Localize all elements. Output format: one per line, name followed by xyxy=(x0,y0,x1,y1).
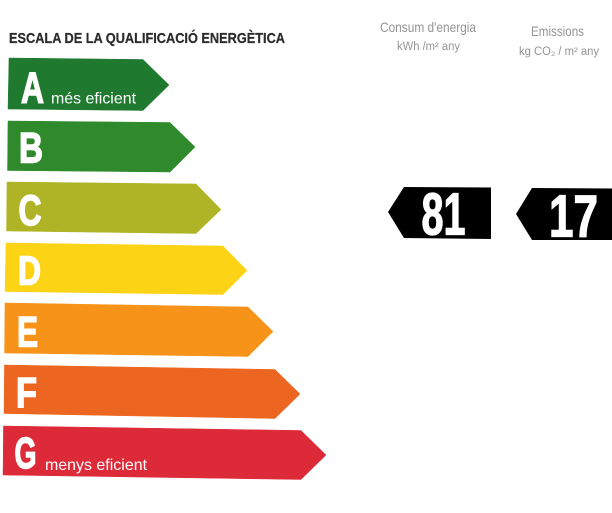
arrow A: més eficient: A xyxy=(21,64,44,112)
arrow E xyxy=(4,303,273,356)
column heading: energy consumption: Consum d'energia xyxy=(380,19,476,35)
value marker: energy consumption 81 xyxy=(388,182,491,248)
column heading: emissions xyxy=(519,23,599,58)
title: ESCALA DE LA QUALIFICACIÓ ENERGÈTICA xyxy=(9,29,285,47)
value marker: emissions 17 xyxy=(516,184,612,250)
arrow C: C xyxy=(18,187,42,235)
arrow G: menys eficient xyxy=(3,426,326,480)
value marker: energy consumption 81: 81 xyxy=(422,182,466,248)
arrow C xyxy=(6,182,221,235)
arrow D: D xyxy=(18,248,41,294)
arrow D xyxy=(5,243,247,294)
arrow A: més eficient xyxy=(8,58,169,112)
column heading: emissions: kg CO₂ / m² any xyxy=(519,46,599,58)
arrow G: menys eficient: G xyxy=(14,429,36,478)
arrow B xyxy=(8,121,195,172)
column heading: emissions: Emissions xyxy=(531,23,584,39)
column heading: energy consumption xyxy=(380,19,476,53)
arrow E: E xyxy=(17,308,38,356)
arrow B: B xyxy=(19,124,43,172)
arrow A: més eficient: més eficient xyxy=(51,90,137,108)
arrow G: menys eficient: menys eficient xyxy=(45,457,148,474)
arrow F xyxy=(4,365,300,418)
arrow F: F xyxy=(16,370,37,418)
column heading: energy consumption: kWh /m² any xyxy=(397,41,460,53)
